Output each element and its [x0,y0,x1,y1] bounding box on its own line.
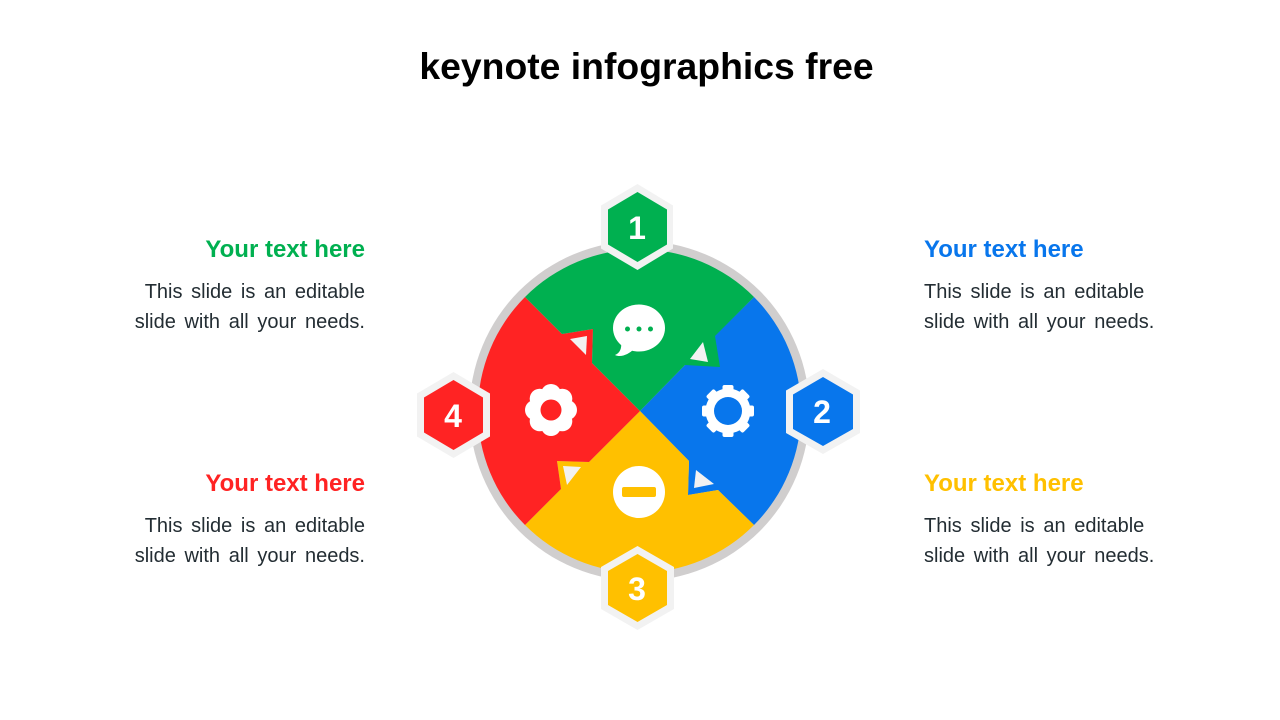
text block: red bottom left [135,470,365,567]
text block: blue top right: slide with all your needs. [924,311,1154,333]
badge 1: 1 [628,210,646,246]
text block: blue top right: This slide is an editable [924,281,1144,303]
text block: yellow bottom right [924,470,1154,567]
text block: red bottom left: Your text here [205,470,365,497]
segment: green [525,249,754,411]
badge 3 [601,546,674,630]
text block: red bottom left: This slide is an editable [145,515,365,537]
segment: yellow [525,411,754,573]
badge 4: 4 [444,398,462,434]
icon: gear [702,385,754,437]
segment: red [478,297,640,525]
text block: blue top right: Your text here [924,236,1084,263]
text block: yellow bottom right: Your text here [924,470,1084,497]
badge 2: 2 [813,394,831,430]
badge 2 [786,369,860,454]
text block: yellow bottom right: This slide is an editable [924,515,1144,537]
text block: green top left: Your text here [205,236,365,263]
text block: blue top right [924,236,1154,333]
badge 3: 3 [628,571,646,607]
segment: blue [640,297,801,525]
text block: red bottom left: slide with all your needs. [135,545,365,567]
grey ring [470,241,810,581]
text block: green top left: slide with all your needs. [135,311,365,333]
icon: flower [525,384,577,436]
badge 4 [417,372,490,458]
arrow: yellow notch [563,466,581,485]
badge 1 [601,184,673,270]
arrow: green notch [690,342,708,362]
icon: speech bubble [613,304,665,356]
text block: yellow bottom right: slide with all your needs. [924,545,1154,567]
text block: green top left: This slide is an editable [145,281,365,303]
text block: green top left [135,236,365,333]
arrow: red notch [570,336,587,355]
arrow: blue notch [694,470,714,488]
icon: minus circle [613,466,665,518]
title: keynote infographics free [419,45,874,87]
